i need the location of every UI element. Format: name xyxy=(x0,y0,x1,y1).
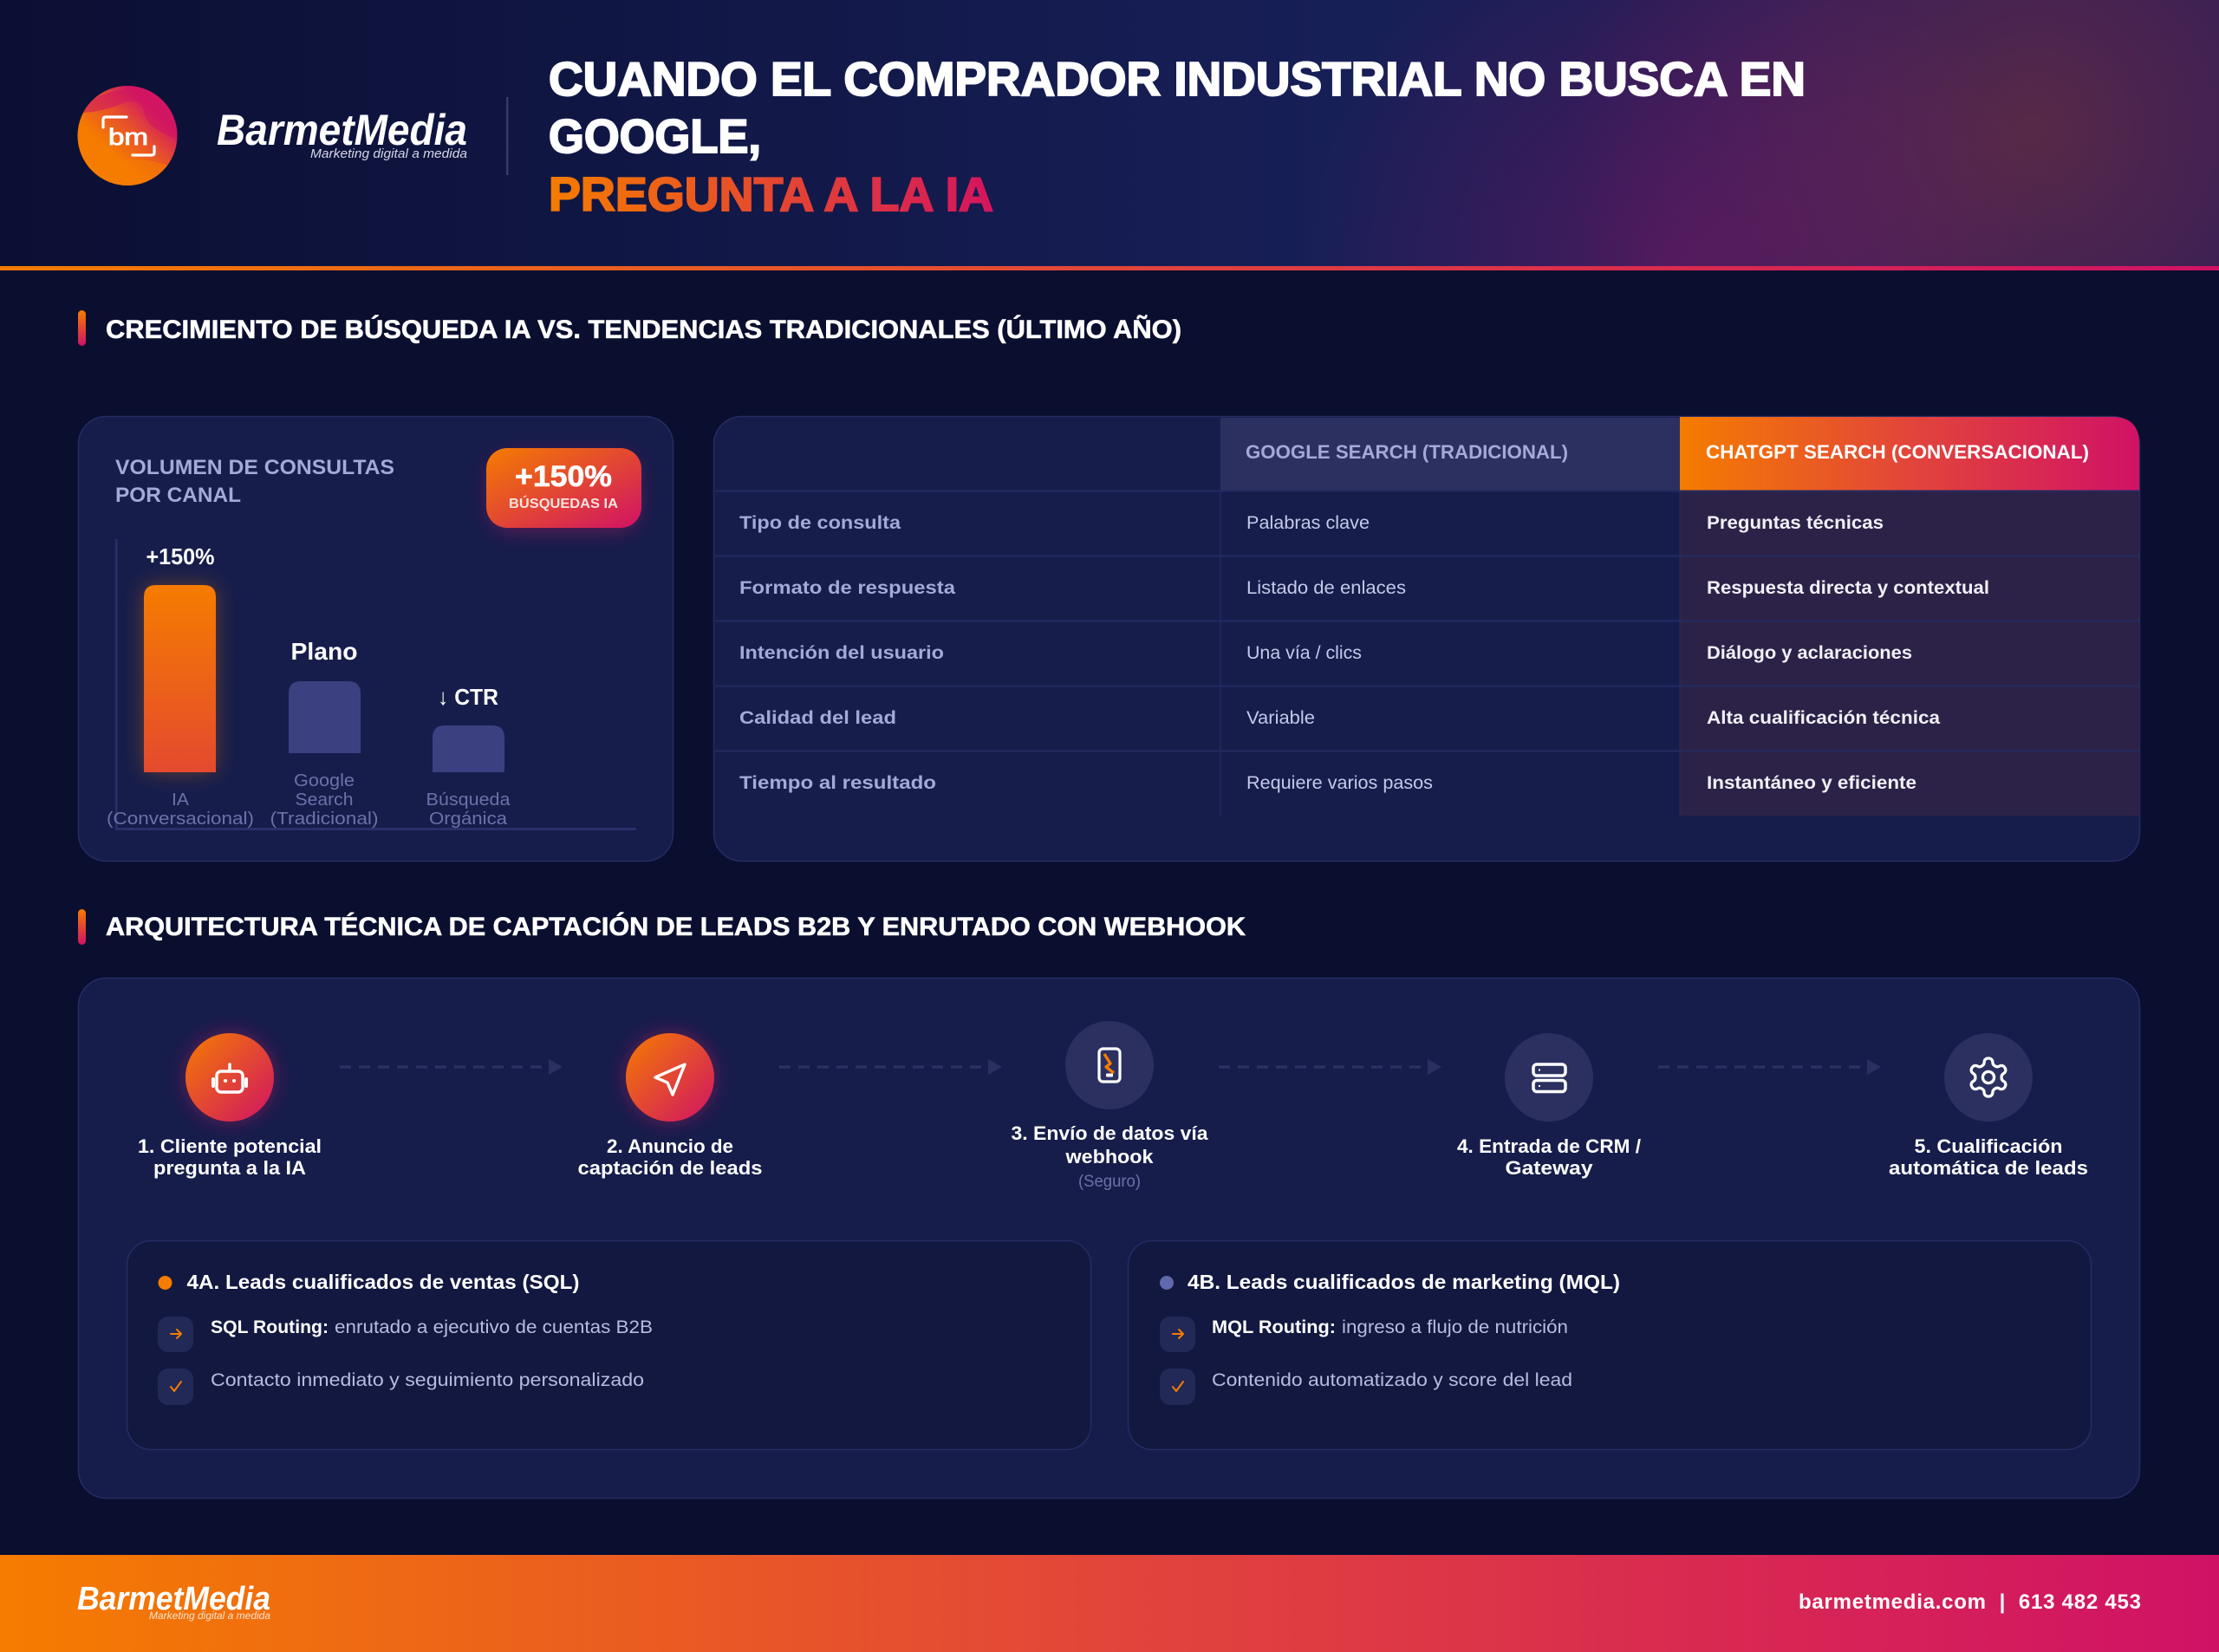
step 4 xyxy=(1457,1033,1641,1179)
icon: gear xyxy=(1971,1058,2006,1096)
panel: SQL leads: SQL Routing: xyxy=(211,1317,329,1337)
chart title: VOLUMEN DE CONSULTAS xyxy=(115,456,394,479)
row: calidad del lead xyxy=(739,708,1940,728)
step 4: Gateway xyxy=(1505,1157,1593,1179)
callout: +150% badge xyxy=(486,448,641,531)
bar: Búsqueda orgánica: Orgánica xyxy=(429,810,508,829)
title: CUANDO EL COMPRADOR INDUSTRIAL NO BUSCA EN xyxy=(549,52,1806,106)
table header: GOOGLE SEARCH (TRADICIONAL) xyxy=(1246,441,1568,463)
bar: Google Search: Google xyxy=(294,771,355,790)
step 3 xyxy=(1011,1021,1208,1191)
step 1 xyxy=(138,1033,322,1179)
footer logo: BarmetMedia xyxy=(77,1581,270,1617)
chart axes xyxy=(115,539,636,830)
panel: MQL leads: MQL Routing: xyxy=(1212,1317,1336,1337)
row: tiempo al resultado: Tiempo al resultado xyxy=(739,773,936,793)
row: intención del usuario: Una vía / clics xyxy=(1246,643,1362,663)
icon: bm logo circle xyxy=(78,86,177,185)
row: tiempo al resultado: Requiere varios pasos xyxy=(1246,773,1433,793)
step 3: 3. Envío de datos vía xyxy=(1011,1122,1208,1144)
footer logo: Marketing digital a medida xyxy=(149,1610,270,1622)
row: calidad del lead: Alta cualificación técnica xyxy=(1707,708,1940,728)
logo wordmark: Marketing digital a medida xyxy=(310,146,467,161)
panel: SQL leads: Contacto inmediato y seguimiento personalizado xyxy=(211,1370,644,1390)
arrow 2 xyxy=(779,1059,1002,1075)
row: intención del usuario: Diálogo y aclaraciones xyxy=(1707,643,1912,663)
header xyxy=(0,0,2219,270)
step 1: pregunta a la IA xyxy=(153,1157,306,1179)
row: tipo de consulta: Palabras clave xyxy=(1246,513,1370,533)
title: PREGUNTA A LA IA xyxy=(549,167,993,221)
row: intención del usuario xyxy=(739,643,1912,663)
icon: check xyxy=(1160,1369,1195,1405)
step 1: 1. Cliente potencial xyxy=(138,1135,322,1157)
bar: IA conversacional xyxy=(107,543,254,829)
table header: CHATGPT SEARCH (CONVERSACIONAL) xyxy=(1706,441,2089,463)
step 3: webhook xyxy=(1064,1146,1154,1167)
row: tipo de consulta xyxy=(739,513,1884,533)
table header xyxy=(1246,441,2089,463)
panel: SQL leads: 4A. Leads cualificados de ventas (SQL) xyxy=(187,1271,579,1293)
arrow 4 xyxy=(1658,1059,1881,1075)
panel: workflow xyxy=(78,978,2139,1498)
step 5 xyxy=(1889,1033,2088,1179)
row: intención del usuario: Intención del usuario xyxy=(739,643,944,663)
footer xyxy=(0,1555,2219,1652)
row: formato de respuesta: Formato de respuesta xyxy=(739,578,955,598)
step 5: automática de leads xyxy=(1889,1157,2088,1179)
footer contact: barmetmedia.com | 613 482 453 xyxy=(1799,1590,2141,1614)
panel: comparison table xyxy=(714,416,2139,862)
panel: MQL leads: 4B. Leads cualificados de marketing (MQL) xyxy=(1188,1271,1620,1293)
row: calidad del lead: Variable xyxy=(1246,708,1315,728)
icon: send arrow xyxy=(655,1064,685,1095)
bar: Búsqueda orgánica: ↓ CTR xyxy=(438,684,498,710)
panel: MQL leads xyxy=(1129,1241,2091,1449)
callout: +150% badge: +150% xyxy=(515,460,612,493)
bar: IA conversacional: (Conversacional) xyxy=(107,810,254,829)
icon: robot xyxy=(213,1064,246,1092)
panel: SQL leads xyxy=(127,1241,1090,1449)
icon: check xyxy=(158,1369,193,1405)
icon: webhook phone xyxy=(1099,1049,1120,1082)
bar: Google Search xyxy=(270,638,378,829)
bar: Google Search: Search xyxy=(295,790,354,810)
row: calidad del lead: Calidad del lead xyxy=(739,708,896,728)
row: tipo de consulta: Tipo de consulta xyxy=(739,513,901,533)
row: formato de respuesta xyxy=(739,578,1989,598)
section heading: growth: CRECIMIENTO DE BÚSQUEDA IA VS. TENDENCIAS TRADICIONALES (ÚLTIMO AÑO) xyxy=(106,315,1181,344)
bar: Google Search: (Tradicional) xyxy=(270,810,378,829)
panel: bar chart card xyxy=(78,416,673,862)
panel: MQL leads: Contenido automatizado y score del lead xyxy=(1212,1370,1572,1390)
panel: SQL leads: enrutado a ejecutivo de cuentas B2B xyxy=(335,1317,653,1337)
bar: Google Search: Plano xyxy=(291,638,357,665)
bar: Búsqueda orgánica: Búsqueda xyxy=(426,790,511,810)
chart title xyxy=(115,456,394,507)
step 3: (Seguro) xyxy=(1078,1173,1141,1191)
chart title: POR CANAL xyxy=(115,484,241,507)
bar: Búsqueda orgánica xyxy=(426,684,511,829)
step 5: 5. Cualificación xyxy=(1914,1135,2063,1157)
step 2: captación de leads xyxy=(577,1157,763,1179)
row: tipo de consulta: Preguntas técnicas xyxy=(1707,513,1884,533)
row: formato de respuesta: Listado de enlaces xyxy=(1246,578,1406,598)
step 2: 2. Anuncio de xyxy=(607,1135,733,1157)
icon: server xyxy=(1533,1064,1565,1092)
row: tiempo al resultado xyxy=(739,773,1916,793)
row: formato de respuesta: Respuesta directa y contextual xyxy=(1707,578,1989,598)
arrow 1 xyxy=(340,1059,563,1075)
icon: arrow xyxy=(158,1317,193,1352)
panel: MQL leads: ingreso a flujo de nutrición xyxy=(1342,1317,1568,1337)
step 4: 4. Entrada de CRM / xyxy=(1457,1135,1641,1157)
callout: +150% badge: BÚSQUEDAS IA xyxy=(509,495,618,511)
section heading: architecture: ARQUITECTURA TÉCNICA DE CAPTACIÓN DE LEADS B2B Y ENRUTADO CON WEBHOOK xyxy=(106,912,1246,941)
icon: bm logo circle: bm xyxy=(108,124,148,150)
logo wordmark: BarmetMedia xyxy=(217,106,467,154)
title: GOOGLE, xyxy=(549,109,761,163)
bar: IA conversacional: +150% xyxy=(146,543,215,569)
row: tiempo al resultado: Instantáneo y eficiente xyxy=(1707,773,1916,793)
title xyxy=(549,52,1806,221)
icon: arrow xyxy=(1160,1317,1195,1352)
bar: IA conversacional: IA xyxy=(172,790,190,810)
arrow 3 xyxy=(1219,1059,1441,1075)
step 2 xyxy=(577,1033,763,1179)
